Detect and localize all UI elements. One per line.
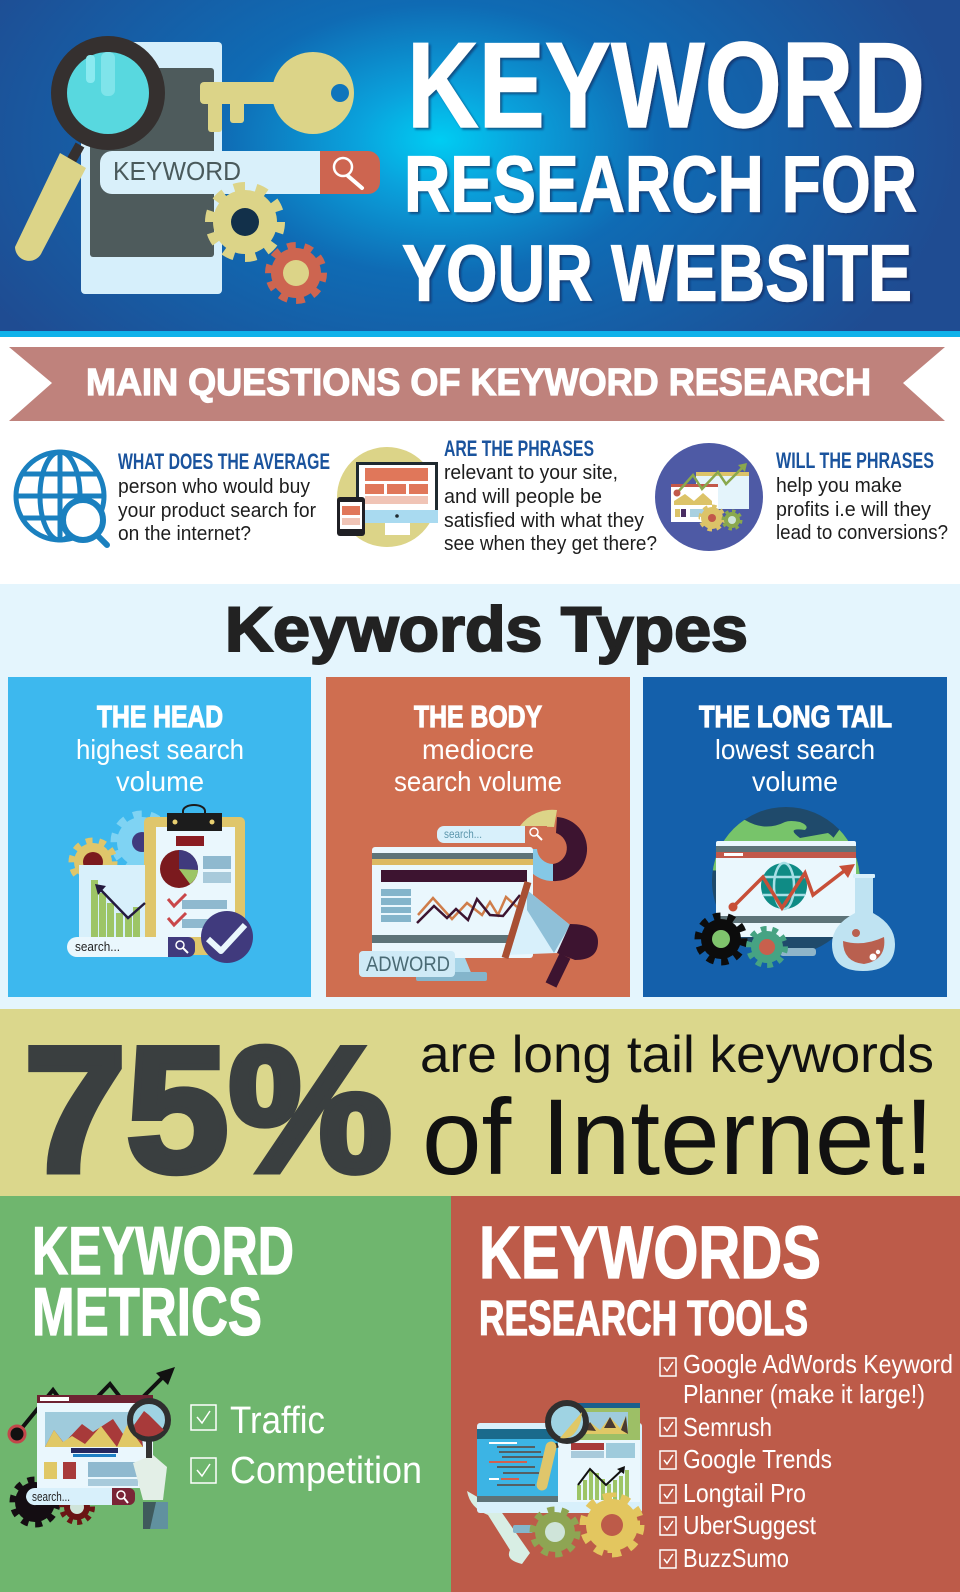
list item: google adwords keyword planner: [660, 1349, 953, 1409]
icon: globe with magnifier: [16, 452, 107, 545]
question 2 text: ARE THE PHRASES: [444, 436, 594, 461]
icon: magnifier: [15, 36, 165, 261]
icon: devices: [337, 447, 438, 547]
question 2 text: see when they get there?: [444, 533, 657, 555]
ribbon heading: main questions: MAIN QUESTIONS OF KEYWORD RESEARCH: [86, 362, 871, 404]
stat text: of Internet!: [422, 1076, 934, 1197]
question 2 text: satisfied with what they: [444, 510, 644, 532]
list item: traffic: [191, 1400, 325, 1442]
card text: the long tail: volume: [752, 766, 838, 797]
search bar: [100, 151, 380, 194]
icon: phone: [81, 42, 222, 294]
question 1 text: on the internet?: [118, 523, 251, 545]
icon: red gear: [269, 246, 323, 300]
list item: buzzsumo: BuzzSumo: [683, 1543, 789, 1573]
heading: keywords research tools: RESEARCH TOOLS: [479, 1292, 808, 1346]
illustration: tools monitor: [467, 1403, 642, 1564]
question 1 text: [118, 449, 330, 545]
illustration: metrics window: [9, 1367, 175, 1529]
card: the long tail: [643, 677, 947, 997]
card text: the long tail: THE LONG TAIL: [699, 699, 892, 734]
question 2 text: and will people be: [444, 486, 602, 508]
question 1 text: your product search for: [118, 500, 316, 522]
header panel: [0, 0, 960, 337]
question 1 text: WHAT DOES THE AVERAGE: [118, 449, 330, 474]
question 3 text: [776, 448, 948, 544]
illustration: clipboard report: search...: [75, 939, 120, 954]
illustration: metrics window: search...: [32, 1489, 70, 1504]
heading: keyword metrics: [32, 1213, 294, 1350]
question 2: [337, 436, 657, 555]
title: [402, 17, 925, 318]
illustration: monitor and megaphone: [359, 810, 598, 985]
list item: google adwords keyword planner: Planner (make it large!): [683, 1379, 925, 1409]
icon: yellow gear: [210, 187, 280, 257]
illustration: clipboard report: [67, 805, 253, 963]
panel: 75 percent stat: [0, 1009, 960, 1209]
heading: keywords types: Keywords Types: [225, 595, 748, 665]
question 3 text: profits i.e will they: [776, 499, 931, 521]
big number: 75%: [24, 1010, 392, 1209]
card: the head: [8, 677, 311, 997]
heading: keywords research tools: KEYWORDS: [479, 1211, 821, 1294]
list item: traffic: Traffic: [230, 1400, 325, 1442]
list item: google trends: Google Trends: [683, 1444, 832, 1474]
list item: semrush: Semrush: [683, 1412, 772, 1442]
illustration: monitor and megaphone: search...: [444, 827, 482, 841]
list item: longtail pro: Longtail Pro: [683, 1478, 806, 1508]
card text: the head: volume: [116, 766, 204, 797]
card text: the head: [76, 699, 244, 797]
card text: the body: search volume: [394, 766, 562, 797]
illustration: globe and flask: [698, 807, 895, 971]
question 3 text: help you make: [776, 475, 902, 497]
question 3 text: lead to conversions?: [776, 522, 948, 544]
list item: ubersuggest: UberSuggest: [683, 1510, 817, 1540]
illustration: monitor and megaphone: ADWORD: [366, 953, 450, 976]
icon: analytics circle: [655, 443, 763, 551]
metrics list: [191, 1400, 422, 1492]
card: the body: [326, 677, 630, 997]
panel: keyword metrics: [0, 1196, 451, 1592]
icon: key: [200, 52, 354, 134]
panel: keywords research tools: [451, 1196, 960, 1592]
card text: the long tail: lowest search: [715, 734, 875, 765]
card text: the body: THE BODY: [414, 699, 542, 734]
card text: the head: THE HEAD: [97, 699, 223, 734]
heading: keywords research tools: [479, 1211, 821, 1346]
card text: the body: mediocre: [422, 734, 534, 765]
heading: keyword metrics: METRICS: [32, 1274, 262, 1350]
panel: keywords types: [0, 584, 960, 1009]
question 2 text: relevant to your site,: [444, 462, 618, 484]
card text: the long tail: [699, 699, 892, 797]
icon: search glass: [334, 158, 362, 188]
tools list: [660, 1349, 953, 1573]
card text: the head: highest search: [76, 734, 244, 765]
stat text: are long tail keywords: [420, 1026, 934, 1084]
question 2 text: [444, 436, 657, 555]
search bar label: KEYWORD: [113, 156, 241, 186]
heading: keyword metrics: KEYWORD: [32, 1213, 294, 1289]
card text: the body: [394, 699, 562, 797]
ribbon heading: main questions: [9, 347, 945, 421]
question 3: [655, 443, 948, 551]
question 1: [16, 449, 330, 545]
question 1 text: person who would buy: [118, 476, 310, 498]
list item: competition: Competition: [230, 1450, 422, 1492]
